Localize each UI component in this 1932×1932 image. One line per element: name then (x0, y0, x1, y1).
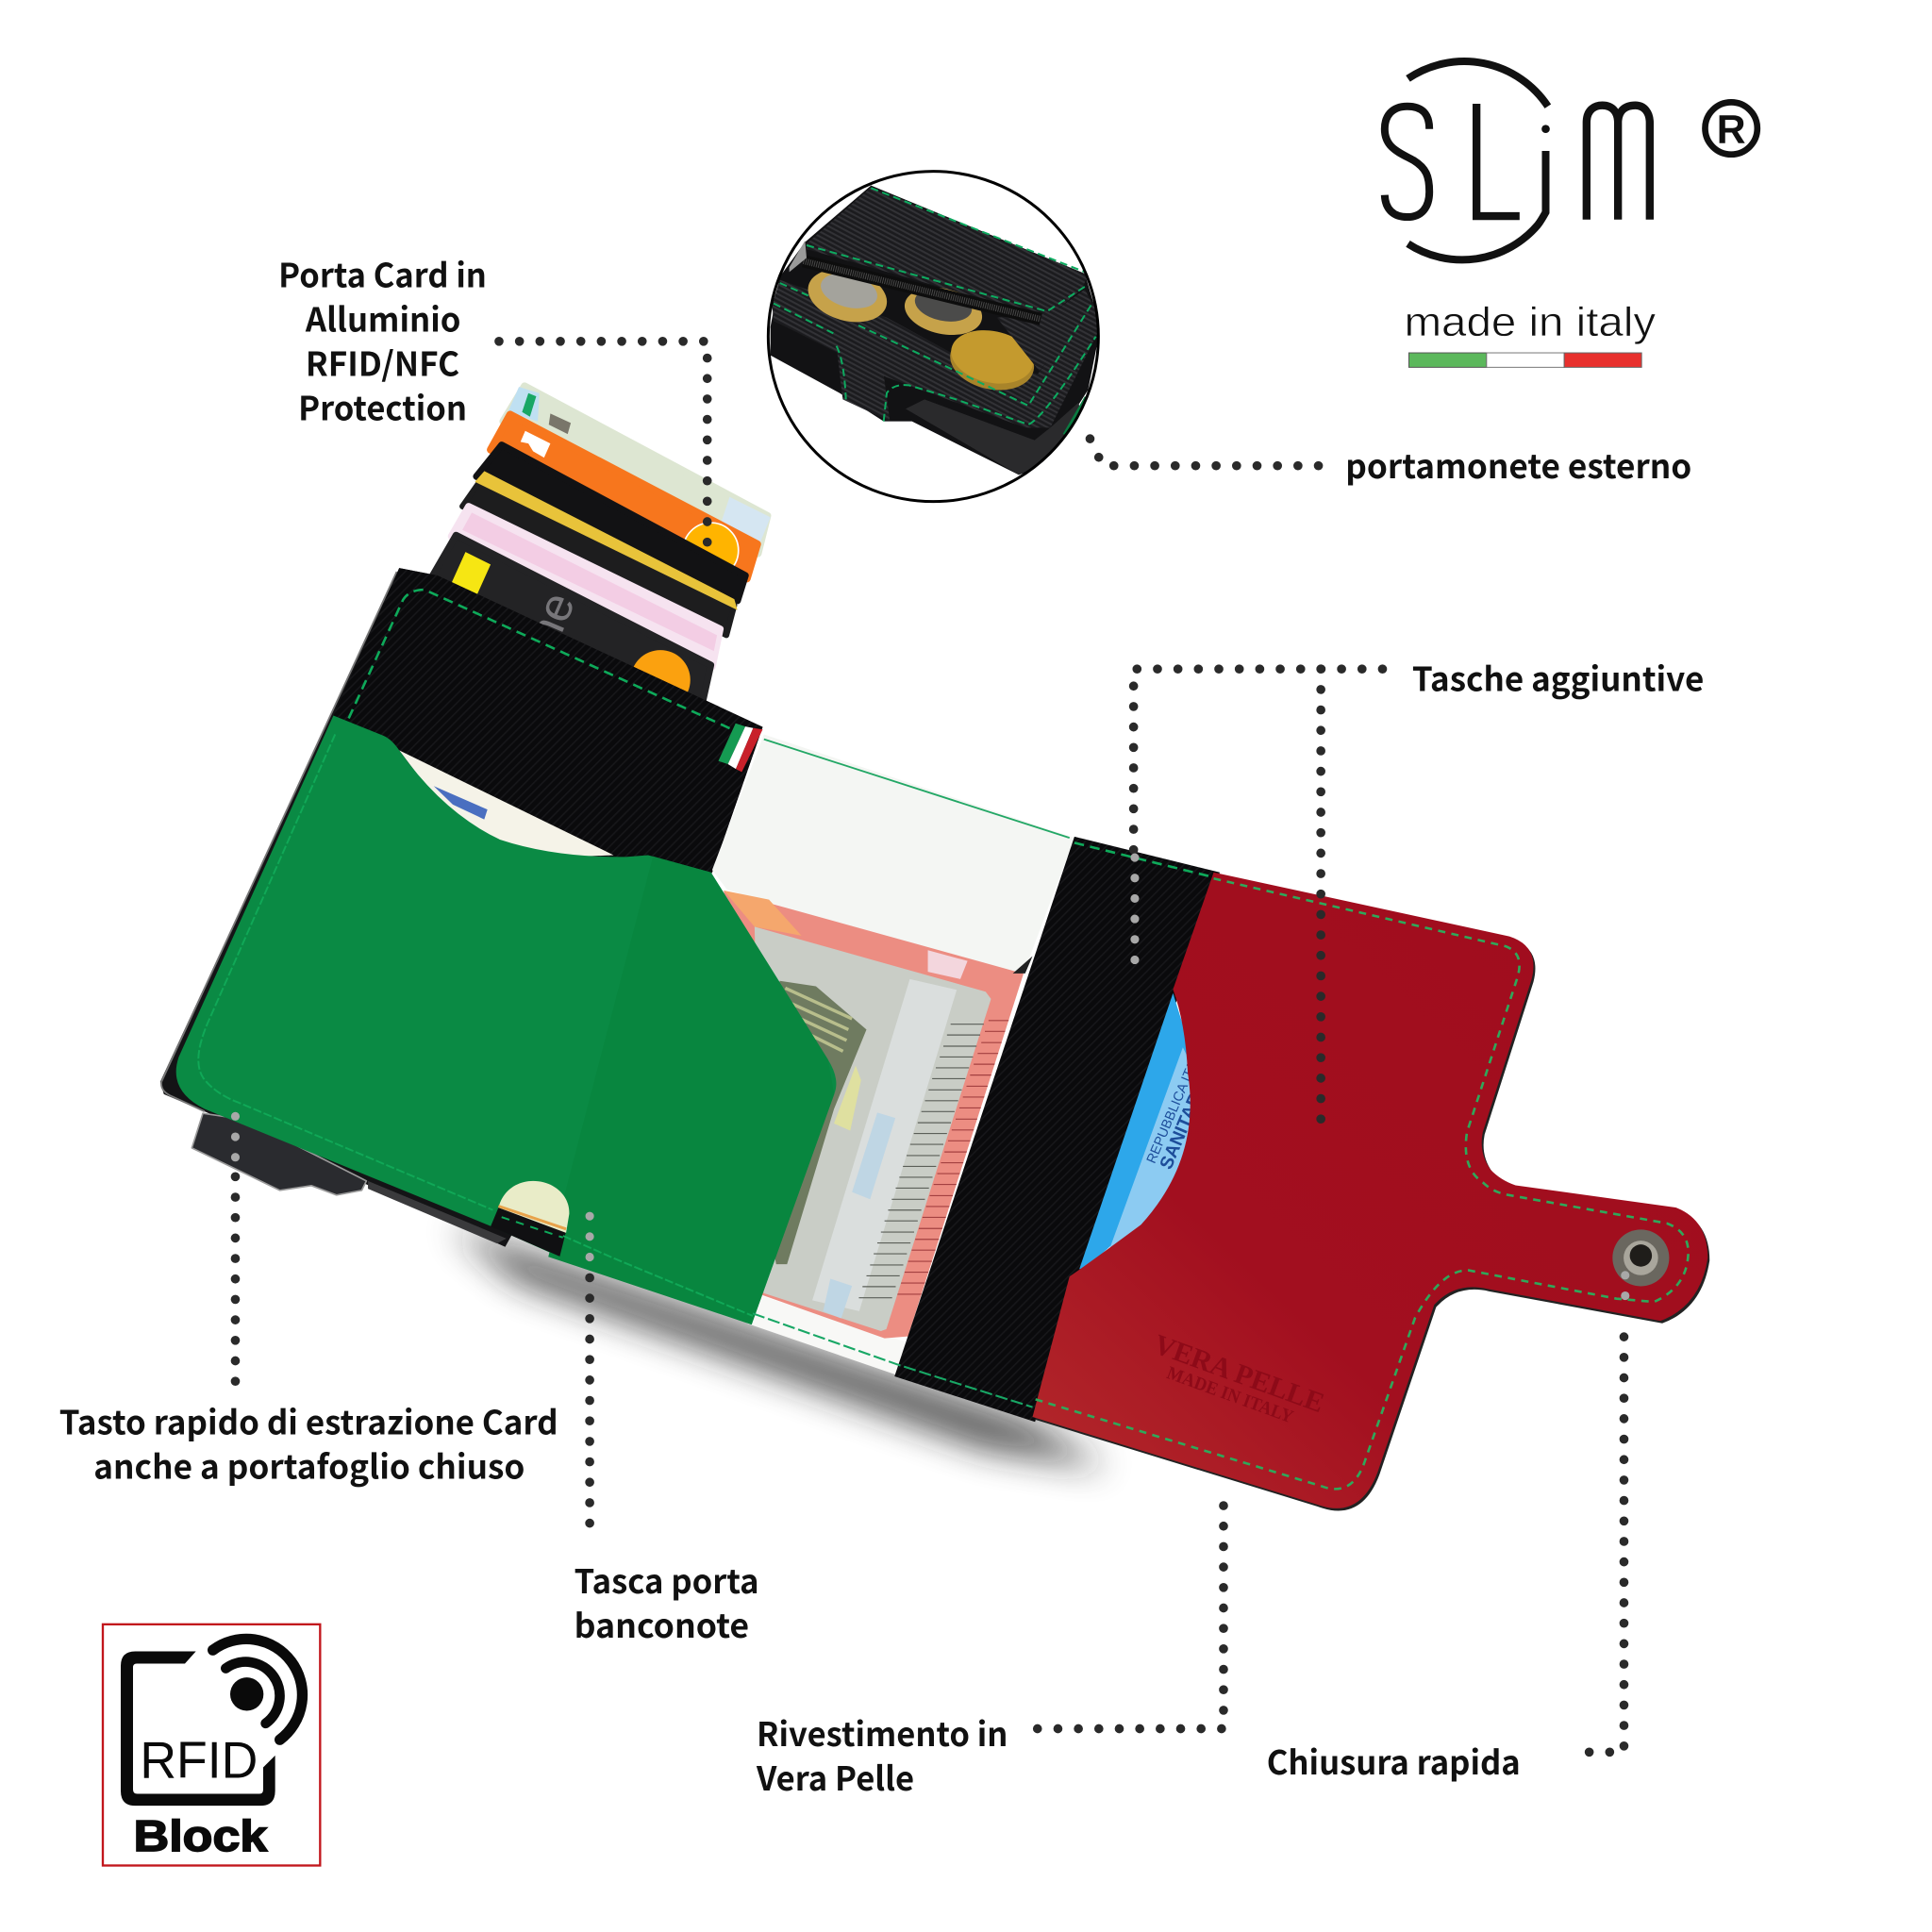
label: Tasca porta banconote: Tasca porta (575, 1556, 759, 1604)
label: Tasto rapido: anche a portafoglio chiuso (93, 1441, 525, 1489)
wallet: metal card holder body (160, 568, 762, 1247)
embossed text: VERA PELLE (1150, 1328, 1328, 1419)
badge: RFID Block: Block (134, 1811, 267, 1860)
thumb notch (491, 1181, 569, 1257)
italian flag tag (718, 724, 762, 772)
leader: portamonete esterno (1082, 422, 1319, 466)
wallet: black fabric strip (894, 837, 1220, 1422)
card: pink card (451, 507, 720, 667)
health card in red pocket: REPUBBLICA ITALIANA (1144, 1024, 1216, 1166)
snap button (1612, 1229, 1669, 1286)
wallet: red leather flap (1033, 873, 1709, 1510)
embossed text: MADE IN ITALY (1164, 1363, 1296, 1427)
wallet: black fabric panel (333, 568, 762, 873)
label: Tasto rapido: Tasto rapido di estrazione Card (59, 1396, 558, 1444)
card: yellow-striped card (462, 471, 738, 635)
label: Rivestimento in Vera Pelle (756, 1708, 1008, 1801)
label: Porta Card in Alluminio: Protection (298, 382, 467, 430)
label: Tasche aggiuntive: Tasche aggiuntive (1412, 654, 1704, 702)
label: Porta Card in Alluminio: Alluminio (305, 293, 460, 341)
label: Tasto rapido (59, 1396, 558, 1489)
card: dark card (431, 535, 710, 709)
green fold (548, 857, 834, 1324)
health card in red pocket (1079, 993, 1216, 1269)
leader: Tasca porta banconote (586, 1216, 593, 1528)
inset: external coin pocket (768, 172, 1101, 502)
quick release button and body edge (192, 1113, 507, 1243)
leader: Porta Card (499, 341, 708, 555)
badge: RFID Block: RFID (140, 1731, 258, 1790)
card: dark card: ne (516, 585, 585, 654)
label: Tasca porta banconote: banconote (575, 1600, 749, 1648)
logo: SLiM (1385, 61, 1757, 367)
leader: Chiusura rapida (1571, 1275, 1625, 1752)
leader: Tasto rapido (232, 1116, 239, 1386)
wallet: red flap stitching (1033, 878, 1689, 1489)
label: Chiusura rapida: Chiusura rapida (1267, 1737, 1521, 1785)
label: Tasca porta banconote (575, 1556, 759, 1648)
label: Rivestimento in Vera Pelle: Rivestimento in (757, 1708, 1008, 1757)
euro banknote (724, 891, 1024, 1339)
card: pale health card (503, 386, 771, 554)
wallet: white inner panel (712, 734, 1074, 1375)
label: portamonete esterno: portamonete esterno (1345, 441, 1691, 489)
label: Rivestimento in Vera Pelle: Vera Pelle (756, 1753, 914, 1801)
label: Porta Card in Alluminio (278, 249, 487, 430)
cards fan (431, 386, 771, 709)
card: black card (476, 445, 745, 601)
logo: SLiM: made in italy (1404, 299, 1656, 345)
leader: Tasche aggiuntive (1134, 669, 1382, 1131)
card: orange card (491, 414, 758, 578)
label: Porta Card in Alluminio: Porta Card in (278, 249, 487, 297)
leader: Rivestimento (1038, 1493, 1224, 1728)
badge: RFID Block (103, 1624, 320, 1866)
logo: SLiM: R (1717, 107, 1746, 152)
wallet: stitching on fabric and green (198, 590, 1214, 1407)
wallet: green leather pocket (176, 715, 836, 1324)
shadow under the wallet (450, 1226, 1109, 1469)
label: Porta Card in Alluminio: RFID/NFC (306, 338, 459, 386)
white card peeking from green pocket (399, 750, 613, 858)
health card in red pocket: SANITARIA (1156, 1073, 1214, 1173)
